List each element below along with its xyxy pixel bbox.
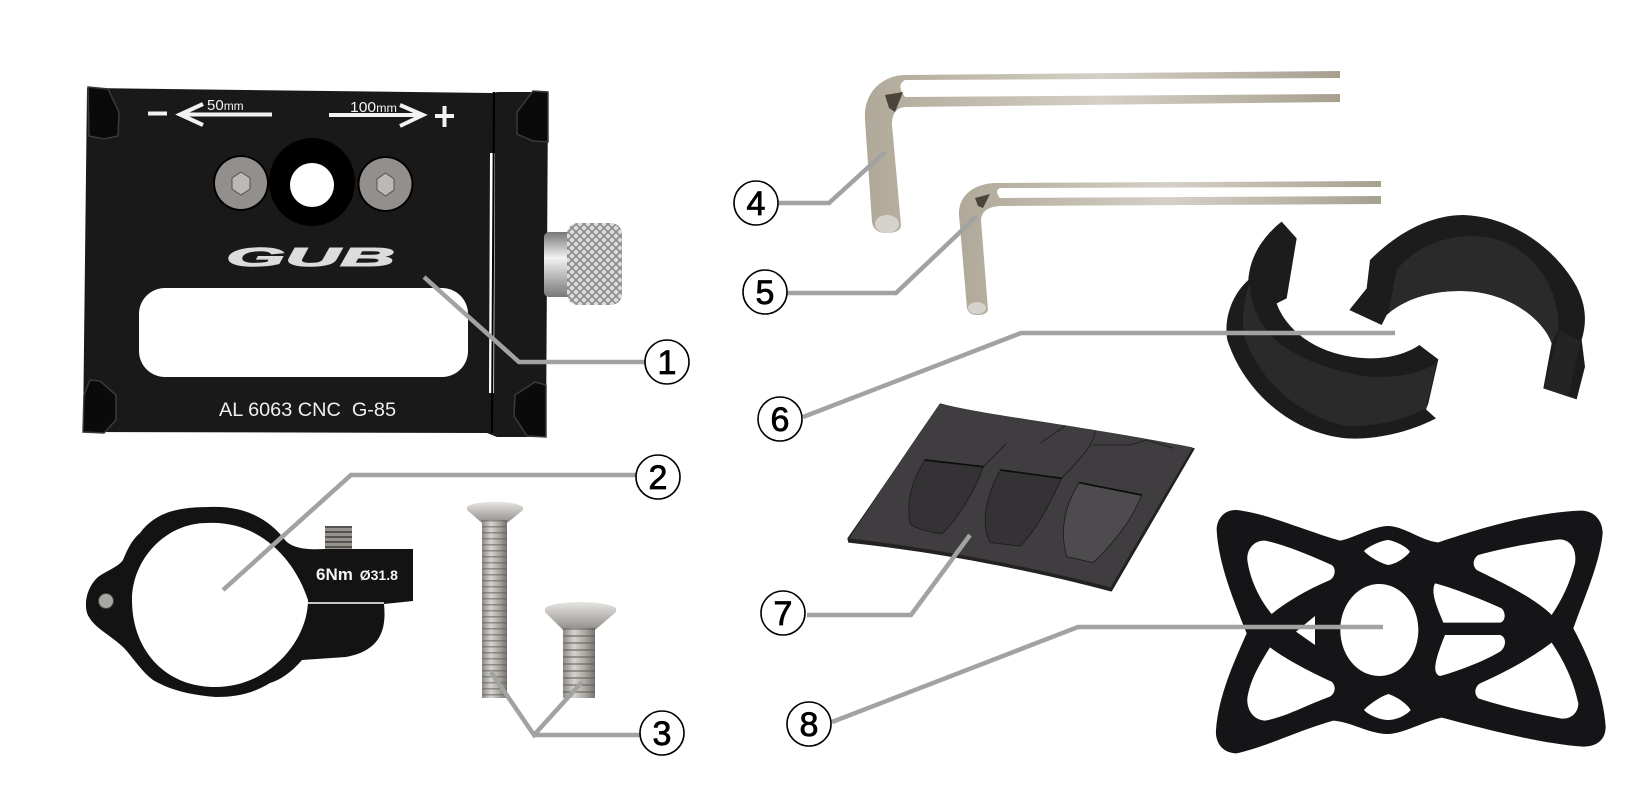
corner grips (83, 87, 548, 437)
callout 7 (761, 535, 970, 635)
callout 7: 7 (774, 595, 792, 633)
oblong window (139, 288, 468, 377)
part 3: short screw (545, 602, 616, 698)
callout 5: 5 (756, 274, 774, 312)
label: 50mm: 50mm (207, 97, 244, 114)
main plate and sliding arm (83, 88, 548, 437)
callout 2 (223, 455, 680, 590)
callout 8 (787, 627, 1383, 746)
clamp body (86, 507, 413, 697)
part 7: rubber pad (847, 403, 1195, 592)
callout 3 (491, 672, 684, 755)
part 8: silicone strap (1216, 510, 1606, 753)
label: 100mm: 100mm (350, 99, 397, 116)
callout 1: 1 (658, 344, 676, 382)
left bushing (1226, 222, 1438, 439)
callout 3: 3 (653, 715, 671, 753)
left hex bolt (213, 155, 269, 211)
callout 4: 4 (747, 185, 765, 223)
slider seam (492, 92, 494, 433)
callout 8: 8 (800, 706, 818, 744)
callout 6 (758, 333, 1395, 441)
callout 4 (734, 152, 885, 225)
part 6: rubber bushings (1226, 215, 1585, 439)
brand logo: GUB (226, 242, 395, 272)
centre washer and hole (269, 138, 355, 226)
threaded post (325, 526, 352, 549)
part 3: long screw (467, 502, 523, 698)
pad pockets (909, 460, 1142, 563)
torque text: 6Nm Ø31.8 (316, 565, 398, 584)
thumb screw (544, 223, 622, 305)
part 4: large hex key (865, 71, 1340, 233)
part 1: phone holder bracket (83, 87, 622, 437)
size marks (148, 104, 454, 127)
model text: AL 6063 CNC G-85 (219, 400, 396, 421)
callout 1 (424, 277, 689, 384)
callout 5 (743, 216, 977, 314)
callout 6: 6 (771, 401, 789, 439)
right bushing (1349, 215, 1585, 399)
callout 2: 2 (649, 459, 667, 497)
pivot pin (98, 594, 114, 608)
right hex bolt (358, 156, 414, 212)
part 2: handlebar clamp (86, 507, 413, 697)
part 5: small hex key (959, 181, 1381, 315)
pad edge (847, 403, 1195, 592)
clamp split (306, 602, 384, 604)
slider gap (489, 153, 495, 393)
pad surface (849, 403, 1193, 587)
